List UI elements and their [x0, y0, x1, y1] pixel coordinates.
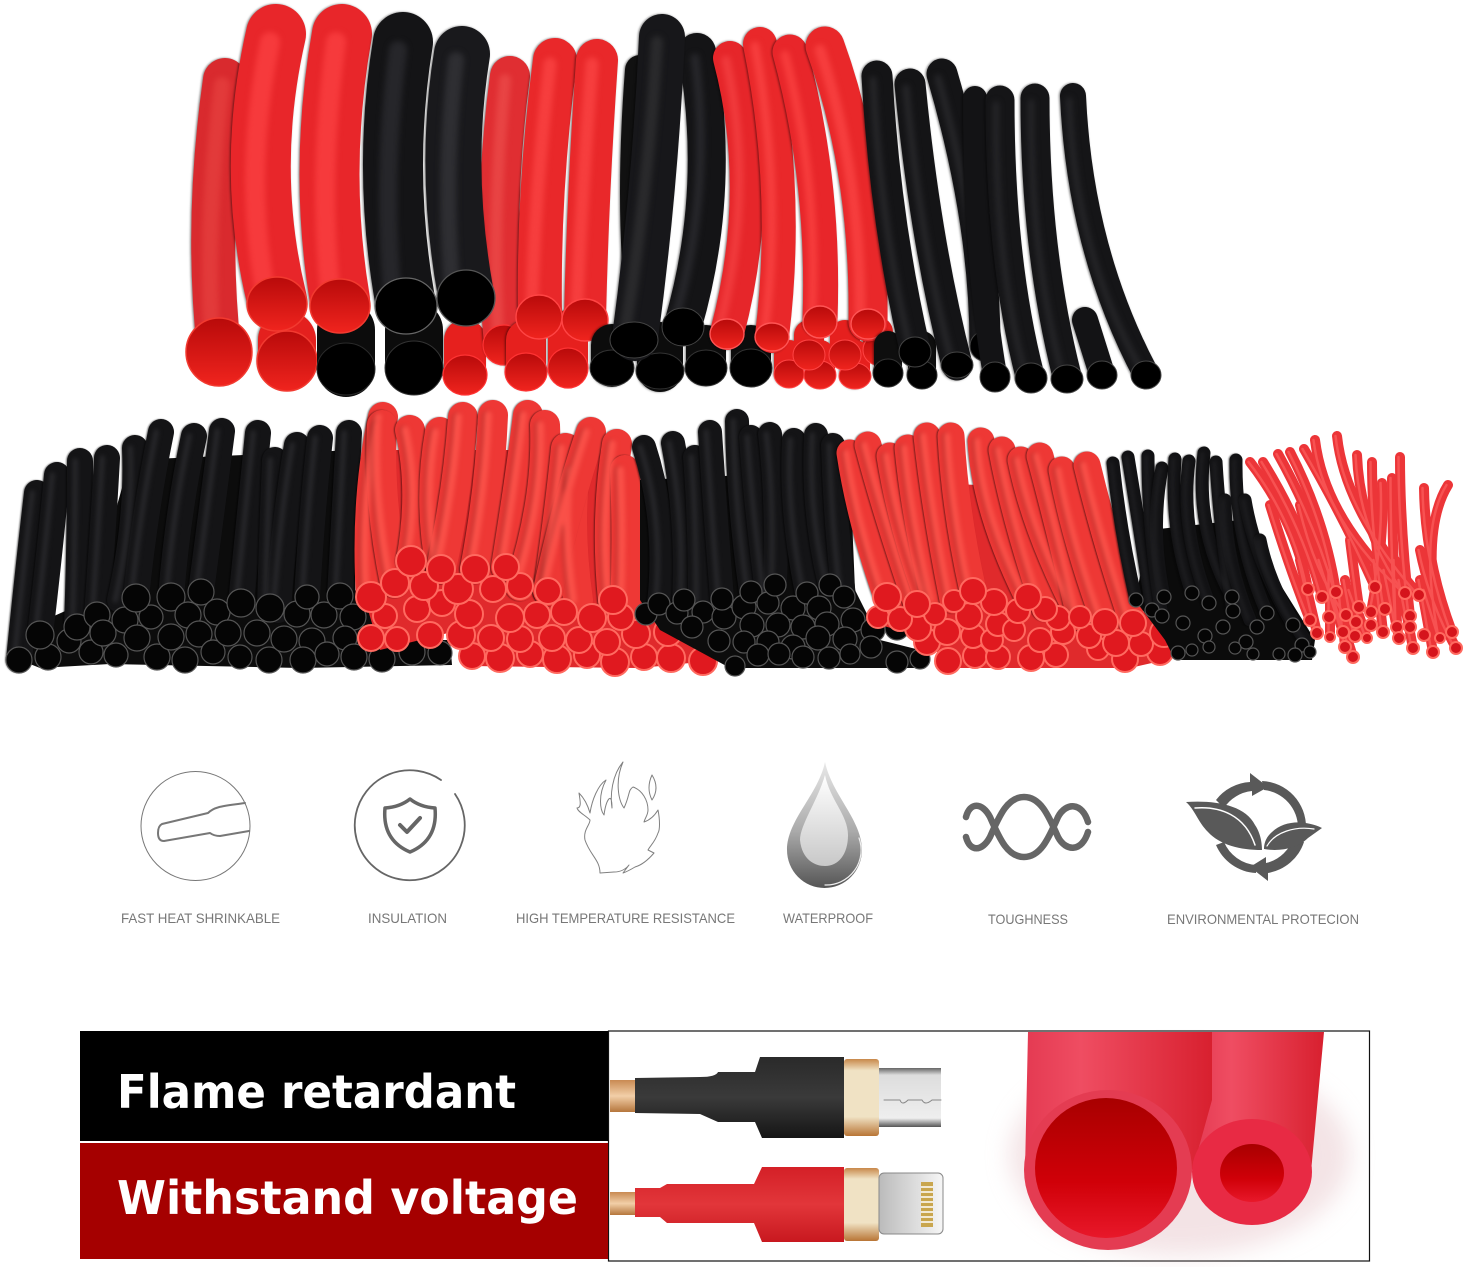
photo: small tube assortment: [6, 415, 1462, 676]
black tube ends, lower row: [317, 330, 443, 395]
feature icon row: [121, 762, 1359, 927]
red bundle 3: [1248, 436, 1462, 663]
black bundle 2: [635, 421, 930, 676]
red tube cross-section photo: [1010, 1032, 1350, 1255]
mid red tubes: [443, 60, 608, 395]
label: waterproof: WATERPROOF: [783, 910, 873, 926]
bottom banner: [80, 1031, 1370, 1261]
label: fast heat shrinkable: FAST HEAT SHRINKABLE: [121, 910, 280, 926]
black micro USB cable: [610, 1057, 941, 1138]
red bundle 1: [356, 415, 720, 676]
panel: flame retardant: [80, 1031, 608, 1141]
thick black tube right: [437, 54, 495, 326]
label: high temperature resistance: HIGH TEMPERATURE RESISTANCE: [516, 910, 735, 926]
red lightning cable: [610, 1167, 943, 1242]
panel: withstand voltage: Withstand voltage: [117, 1171, 578, 1225]
red bundle 2: [846, 436, 1192, 674]
red tube ends, lower row: [257, 331, 317, 391]
red tube pair: [186, 80, 252, 386]
label: toughness: TOUGHNESS: [988, 911, 1068, 927]
mid black tubes: [590, 37, 772, 389]
photo: large tube assortment: [186, 0, 1161, 395]
slim red tubes: [710, 44, 893, 389]
panel: withstand voltage: [80, 1143, 608, 1259]
black bundle 1: [6, 431, 452, 673]
black bundle 3: [1111, 453, 1316, 662]
icon: insulation shield: [355, 770, 465, 880]
small tube: [1192, 1032, 1324, 1225]
icon: fast heat shrinkable tube: [141, 772, 250, 880]
thick red tube right: [310, 34, 370, 333]
large tube: [1024, 1032, 1212, 1250]
icon: environmental leaves and arrows: [1186, 773, 1322, 881]
panel: flame retardant: Flame retardant: [117, 1065, 516, 1119]
label: insulation: INSULATION: [368, 910, 447, 926]
icon: flame: [577, 762, 660, 873]
thick red tube left: [247, 0, 322, 331]
thick black tube left: [375, 42, 437, 334]
icon: toughness interlaced curves: [966, 797, 1088, 857]
icon: water drop: [787, 762, 862, 888]
label: environmental protection: ENVIRONMENTAL PROTECION: [1167, 911, 1359, 927]
slim black tubes: [873, 74, 1161, 393]
photo panel frame: [608, 1031, 1370, 1261]
